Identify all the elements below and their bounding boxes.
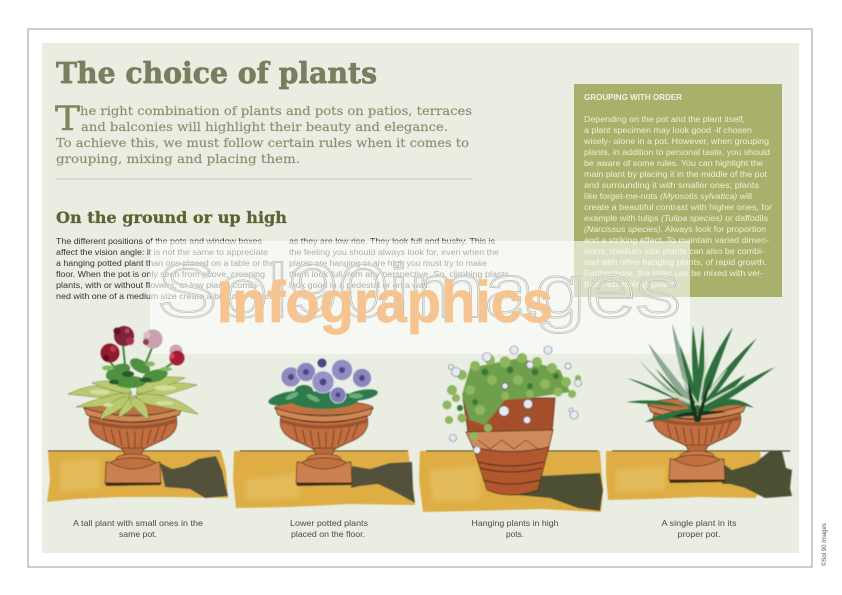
intro paragraph: [55, 99, 472, 166]
caption 4: [662, 518, 736, 539]
flowers 2: [281, 360, 372, 403]
caption 4: proper pot.: [678, 529, 720, 539]
watermark band: [150, 241, 690, 354]
panel text: and a striking effect. To maintain varied dimen-: [584, 235, 769, 245]
body text column 1: floor. When the pot is only seen from above, creeping: [56, 269, 265, 279]
panel text: and surrounding it with smaller ones; plants: [584, 180, 759, 190]
pot 4: [648, 398, 746, 483]
watermark: Infographics: Infographics: [217, 270, 553, 335]
panel heading: GROUPING WITH ORDER: [584, 92, 682, 102]
pot 3: [463, 398, 555, 495]
panel text: Depending on the pot and the plant itself,: [584, 114, 745, 124]
body text column 1: ned with one of a medium size create a beautiful effect: [56, 291, 273, 301]
intro paragraph: and balconies will highlight their beauty and elegance.: [81, 119, 448, 134]
caption 1: same pot.: [119, 529, 157, 539]
panel: grouping with order: [574, 84, 782, 297]
title: The choice of plants: [56, 56, 377, 90]
intro paragraph: To achieve this, we must follow certain rules when it comes to: [56, 135, 469, 150]
caption 3: pots.: [506, 529, 524, 539]
panel text: [583, 114, 772, 289]
caption 1: A tall plant with small ones in the: [73, 518, 203, 528]
caption 4: A single plant in its: [662, 518, 736, 528]
watermark: Sol90images: Sol90images: [157, 249, 681, 334]
panel text: plants, in addition to personal taste, you should: [584, 147, 770, 157]
foliage 1: [68, 326, 198, 420]
caption 2: [290, 518, 368, 539]
floor 3: [419, 451, 603, 512]
pot 1: [84, 401, 182, 486]
pot 2: [275, 401, 373, 486]
floor 1: [47, 451, 228, 502]
foliage 4: [626, 323, 775, 422]
body text column 1: The different positions of the pots and window boxes: [56, 236, 262, 246]
body text column 1: a hanging potted plant than one placed on a table or the: [56, 258, 275, 268]
panel text: like forget-me-nots (Myosotis sylvatica) will: [584, 191, 752, 201]
background panel: [42, 43, 799, 553]
panel text: main plant by placing it in the middle of the pot: [584, 169, 768, 179]
panel text: sions, medium-size plants can also be combi-: [584, 246, 764, 256]
flowers 3: [448, 346, 582, 454]
floor 4: [606, 451, 765, 500]
flowers 1: [114, 326, 134, 346]
shadow 3: [505, 473, 603, 511]
panel text: create a beautiful contrast with higher ones, for: [584, 202, 772, 212]
body text column 2: the feeling you should always look for, even when the: [289, 247, 499, 257]
body text column 2: [289, 236, 509, 290]
caption 3: [472, 518, 559, 539]
body text column 2: plants are hanging or are high you must try to make: [289, 258, 487, 268]
caption 2: placed on the floor.: [291, 529, 365, 539]
heading: on the ground or up high: On the ground or up high: [56, 208, 287, 227]
panel text: wisely- alone in a pot. However, when grouping: [583, 136, 769, 146]
panel text: a plant specimen may look good -if chosen: [584, 125, 752, 135]
shadow 1: [160, 456, 228, 498]
caption 1: [73, 518, 203, 539]
body text column 1: [56, 236, 275, 301]
watermark: Sol90images: Sol90images: [157, 249, 681, 334]
body text column 1: plants, with or without flowers, or low plants combi-: [56, 280, 260, 290]
body text column 2: as they are low rise. They look full and bushy. This is: [289, 236, 495, 246]
caption 3: Hanging plants in high: [472, 518, 559, 528]
panel text: example with tulips (Tulipa species) or daffodils: [584, 213, 768, 223]
panel text: tical-stopping plants.: [584, 279, 683, 289]
caption 2: Lower potted plants: [290, 518, 368, 528]
illustration: tall plant with small ones: [47, 326, 228, 502]
shadow 2: [351, 462, 415, 503]
intro paragraph: grouping, mixing and placing them.: [56, 151, 300, 166]
illustration: lower potted plants: [233, 358, 415, 508]
panel text: be aware of some rules. You can highlight the: [584, 158, 763, 168]
body text column 1: affect the vision angle: it is not the same to appreciate: [56, 247, 268, 257]
intro paragraph: he right combination of plants and pots on patios, terraces: [80, 103, 472, 118]
panel text: ned with other hanging plants, of rapid growth.: [584, 257, 767, 267]
credit: ©Sol 90 Images: [821, 523, 828, 566]
shadow 4: [722, 451, 792, 498]
panel text: Furthermore, the latter can be mixed with ver-: [584, 268, 763, 278]
illustration: hanging plants in high pots: [419, 346, 603, 512]
captions: [73, 518, 736, 539]
illustration: a single plant: [606, 323, 792, 500]
floor 2: [233, 451, 415, 508]
drop cap: T: [55, 99, 80, 139]
body text column 2: look good in a pedestal or on a wall.: [289, 280, 430, 290]
body text column 2: them look full from any perspective. So, climbing plants: [289, 269, 509, 279]
foliage 2: [267, 358, 379, 409]
foliage 3: [442, 346, 582, 454]
panel text: (Narcissus species). Always look for proportion: [584, 224, 766, 234]
